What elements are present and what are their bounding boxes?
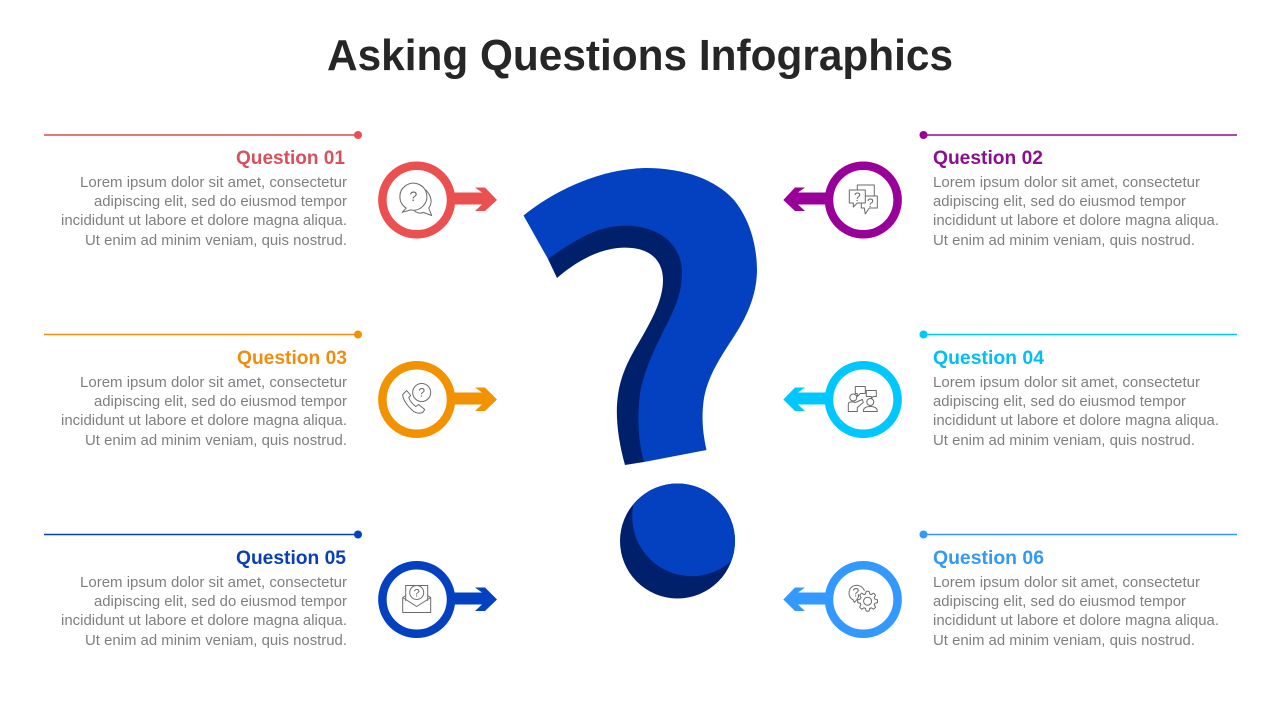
icon: question bubble and gear: ? [852,586,859,600]
body text: Ut enim ad minim veniam, quis nostrud. [85,433,347,449]
arrow [783,388,830,411]
icon: stacked question bubbles: ? [854,190,861,204]
panel: question 02 [783,131,1237,249]
body text: Ut enim ad minim veniam, quis nostrud. [933,633,1195,649]
ring [382,166,451,234]
body text: incididunt ut labore et dolore magna aliqua. [933,213,1219,229]
panel: question 06 [783,530,1237,649]
body text: adipiscing elit, sed do eiusmod tempor [933,194,1186,210]
body text: Lorem ipsum dolor sit amet, consectetur [80,175,347,191]
body text: adipiscing elit, sed do eiusmod tempor [933,594,1186,610]
panel: question 05 [44,530,497,649]
heading: Question 02 [933,147,1043,169]
body text: Ut enim ad minim veniam, quis nostrud. [933,233,1195,249]
icon: phone with question: ? [418,386,425,400]
heading: Question 03 [237,347,347,369]
body text: incididunt ut labore et dolore magna aliqua. [61,213,347,229]
title: Asking Questions Infographics [327,31,953,80]
question mark dot [632,484,735,576]
body text: incididunt ut labore et dolore magna aliqua. [61,413,347,429]
icon: envelope with question [403,586,431,612]
ring [829,365,898,434]
heading: Question 01 [236,147,345,169]
body text: Lorem ipsum dolor sit amet, consectetur [933,575,1200,591]
arrow [783,588,830,611]
leader line [44,530,362,538]
icon: two people talking [848,386,877,412]
body text: adipiscing elit, sed do eiusmod tempor [94,394,347,410]
body text: Ut enim ad minim veniam, quis nostrud. [933,433,1195,449]
arrow [783,188,830,211]
panel: question 01 [44,131,497,249]
icon: question speech bubbles: ? [410,188,418,204]
ring [382,565,451,634]
body text [933,375,1219,449]
icon: stacked question bubbles: ? [867,196,874,210]
icon: question bubble and gear [849,585,878,611]
body text: Lorem ipsum dolor sit amet, consectetur [933,175,1200,191]
question mark stem shadow [548,200,700,465]
body text: adipiscing elit, sed do eiusmod tempor [94,594,347,610]
ring [382,365,451,434]
heading: Question 05 [236,547,346,569]
body text: incididunt ut labore et dolore magna aliqua. [933,613,1219,629]
leader line [920,530,1237,538]
leader line [44,131,362,139]
heading: Question 06 [933,547,1044,569]
body text: Lorem ipsum dolor sit amet, consectetur [80,575,347,591]
icon: envelope with question: ? [414,588,420,600]
icon: question speech bubbles [400,183,432,216]
icon: stacked question bubbles [849,185,877,214]
body text [933,175,1219,249]
panel: question 04 [783,330,1237,449]
body text: adipiscing elit, sed do eiusmod tempor [933,394,1186,410]
question mark dot shadow [620,484,735,598]
body text [61,175,347,249]
question mark stem [524,168,757,462]
body text: Lorem ipsum dolor sit amet, consectetur [80,375,347,391]
body text: adipiscing elit, sed do eiusmod tempor [94,194,347,210]
leader line [920,330,1237,338]
body text: Ut enim ad minim veniam, quis nostrud. [85,233,347,249]
body text: Ut enim ad minim veniam, quis nostrud. [85,633,347,649]
panel: question 03 [44,330,497,449]
arrow [450,388,497,411]
ring [829,565,898,634]
body text: incididunt ut labore et dolore magna aliqua. [61,613,347,629]
body text [61,375,347,449]
body text [933,575,1219,649]
heading: Question 04 [933,347,1044,369]
ring [829,166,898,234]
body text: incididunt ut labore et dolore magna aliqua. [933,413,1219,429]
arrow [450,188,497,211]
leader line [44,330,362,338]
body text [61,575,347,649]
leader line [920,131,1237,139]
body text: Lorem ipsum dolor sit amet, consectetur [933,375,1200,391]
icon: phone with question [403,384,431,413]
arrow [450,588,497,611]
central question mark [524,168,757,598]
